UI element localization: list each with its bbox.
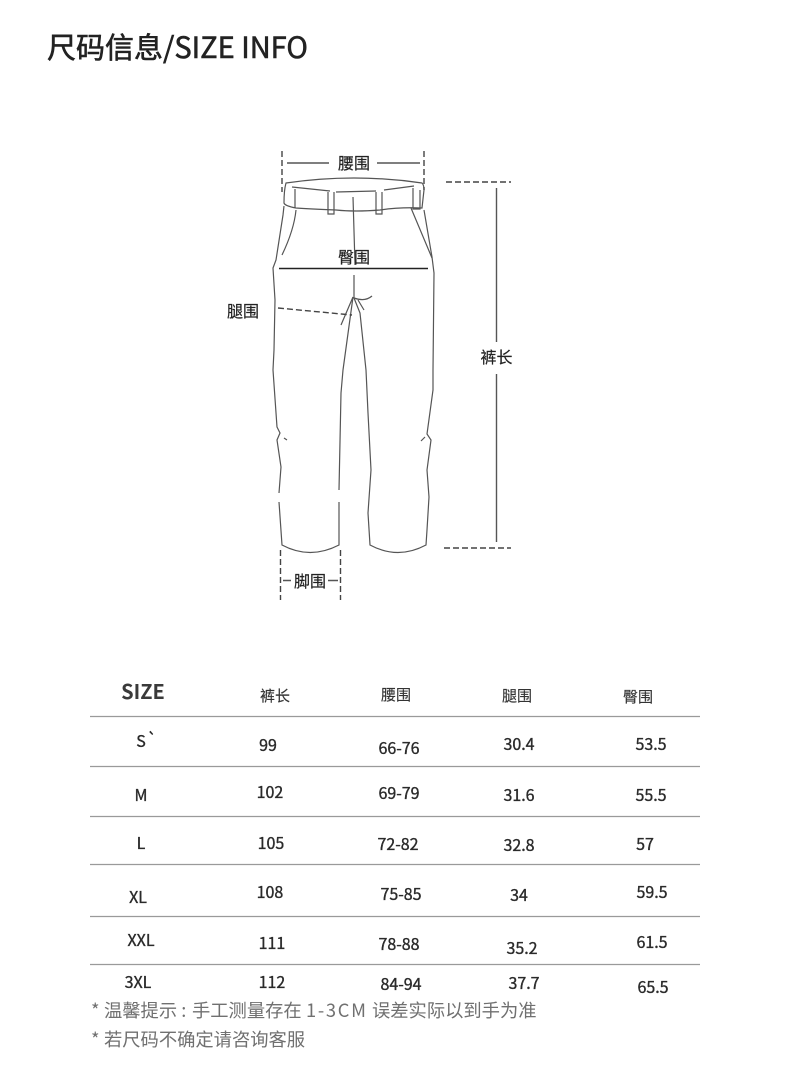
table header: 裤长 [260,685,290,706]
row 3XL: 37.7 [508,970,540,994]
row M: 31.6 [503,782,535,806]
footnotes [91,997,537,1052]
note: contact service: * [91,1026,100,1052]
size table [90,676,700,998]
note: measurement error: 手工测量存在 [192,997,302,1023]
row M: 69-79 [378,780,420,804]
table header: 腿围 [502,685,532,706]
row XL: 75-85 [380,881,422,905]
note: measurement error: * [91,997,100,1023]
row L: 105 [258,830,284,854]
table row lines [90,716,700,964]
row 3XL [125,969,669,998]
note: measurement error: 1-3CM [306,997,368,1023]
table header: 腰围 [381,684,411,705]
row M: M [134,782,148,806]
table header: 臀围 [623,686,653,707]
row 3XL: 112 [259,969,285,993]
row M: 55.5 [635,782,667,806]
table header: SIZE [121,676,165,705]
row L [137,830,654,856]
thigh measure: 腿围 [227,298,259,322]
hip measure: 臀围 [338,244,370,268]
waist measure: 腰围 [338,150,370,174]
row XL: XL [129,884,147,908]
row XXL: 78-88 [378,931,420,955]
row L: 32.8 [503,832,535,856]
length measure: 裤长 [480,344,513,368]
row S: 30.4 [503,731,535,755]
row XL: 59.5 [636,879,668,903]
row S [136,726,667,759]
row L: L [137,830,146,854]
waist measure [282,150,424,192]
row 3XL: 3XL [125,969,152,993]
length measure [444,182,513,548]
note: measurement error: 温馨提示 : [104,997,186,1023]
row XXL: 61.5 [636,929,668,953]
row L: 57 [636,831,654,855]
note: contact service: 若尺码不确定请咨询客服 [104,1026,305,1052]
row L: 72-82 [377,831,419,855]
row M [134,779,667,806]
row XXL: XXL [127,927,155,951]
row XL: 108 [257,879,283,903]
row XXL [127,927,668,959]
row XXL: 35.2 [506,935,538,959]
row XL [129,879,668,908]
row S: 66-76 [378,735,420,759]
row S: ` [147,726,157,750]
row 3XL: 84-94 [380,971,422,995]
hem measure: 脚围 [294,568,326,592]
row S: 53.5 [635,731,667,755]
hem measure [280,550,340,600]
table header [121,676,653,707]
row XL: 34 [510,882,528,906]
note: measurement error: 误差实际以到手为准 [372,997,537,1023]
row 3XL: 65.5 [637,974,669,998]
row S: 99 [259,732,277,756]
thigh measure [227,298,352,322]
row S: S [136,728,146,752]
row M: 102 [257,779,283,803]
pants measurement diagram [227,150,513,600]
title: 尺码信息/SIZE INFO [47,25,308,67]
row XXL: 111 [259,930,285,954]
icon: pants outline [273,178,434,552]
